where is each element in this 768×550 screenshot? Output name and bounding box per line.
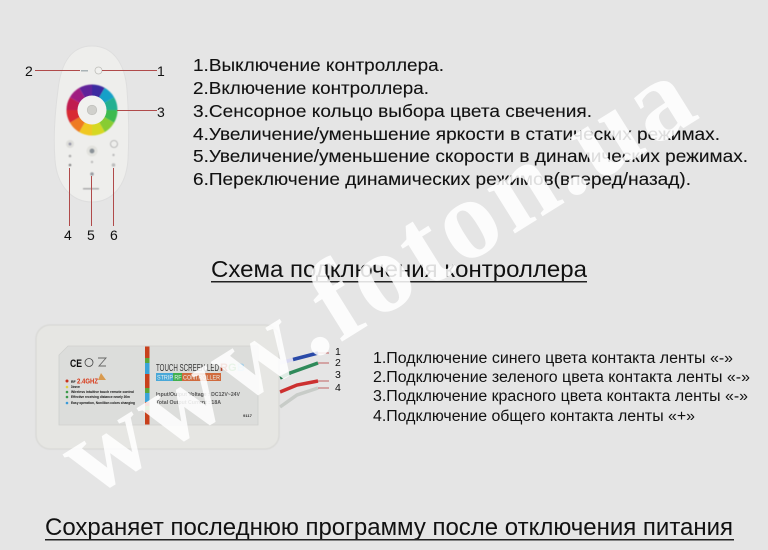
product title: G [228, 362, 237, 374]
wiring list: 1.Подключение синего цвета контакта ленты «-» [373, 350, 733, 367]
2.4GHz badge: 2.4GHZ [77, 378, 99, 386]
wire numbers [335, 346, 341, 394]
feature list: 5.Увеличение/уменьшение скорости в динамических режимах. [193, 146, 748, 166]
ratings text: 9117 [243, 413, 253, 418]
wiring list: 4.Подключение общего контакта ленты «+» [373, 408, 695, 425]
product title: B [237, 362, 245, 374]
heading: wiring diagram: Схема подключения контроллера [211, 256, 587, 282]
2.4GHz badge: RF [71, 380, 77, 384]
callout numbers: 6 [110, 227, 118, 243]
wire numbers: 3 [335, 369, 341, 381]
ring centre [78, 96, 106, 124]
feature list: 6.Переключение динамических режимов(вперед/назад). [193, 169, 691, 189]
feature bullets: Easy operation, Nonillion colors changing [71, 401, 135, 405]
wire leads [318, 353, 329, 388]
feature bullets: Dimmer [71, 385, 80, 389]
touch buttons [66, 140, 118, 190]
colour strip [145, 346, 150, 424]
feature bullets [66, 385, 135, 405]
callout numbers: 5 [87, 227, 95, 243]
certification marks: CE [70, 358, 82, 370]
wiring list: 2.Подключение зеленого цвета контакта ленты «-» [373, 369, 750, 386]
watermark: www.foton.ua [36, 29, 717, 520]
feature list: 4.Увеличение/уменьшение яркости в статических режимах. [193, 124, 720, 144]
callout numbers: 1 [157, 63, 165, 79]
callout lines [35, 70, 157, 226]
wiring list [373, 350, 750, 425]
remote body [54, 46, 129, 202]
label panel [59, 346, 258, 425]
power buttons [81, 67, 102, 74]
feature list: 1.Выключение контроллера. [193, 55, 444, 75]
wire numbers: 2 [335, 357, 341, 369]
callout numbers: 3 [157, 104, 165, 120]
wiring list: 3.Подключение красного цвета контакта ленты «-» [373, 388, 748, 405]
controller box [36, 325, 341, 449]
feature list: 3.Сенсорное кольцо выбора цвета свечения. [193, 101, 592, 121]
feature bullets: Wireless intuitive touch remote control [71, 390, 134, 394]
wires [280, 353, 318, 407]
product title: R [220, 362, 228, 374]
callout numbers: 4 [64, 227, 72, 243]
certification marks [70, 358, 106, 370]
colour ring [66, 84, 118, 136]
feature bullets: Effective receiving distance nearly 30m [71, 395, 130, 399]
housing [36, 325, 279, 449]
feature list [193, 55, 748, 189]
ratings text [156, 392, 253, 418]
ratings text: Input/Output Voltage : DC12V~24V [156, 392, 240, 398]
wire numbers: 1 [335, 346, 341, 358]
footer note: Сохраняет последнюю программу после отключения питания [45, 514, 733, 541]
product title: TOUCH SCREEN LED [156, 363, 219, 374]
remote control with callouts [25, 46, 165, 243]
callout numbers [25, 63, 165, 243]
feature list: 2.Включение контроллера. [193, 78, 429, 98]
wire numbers: 4 [335, 382, 341, 394]
callout numbers: 2 [25, 63, 33, 79]
2.4GHz badge [66, 373, 106, 386]
ratings text: Total Output Current : 18A [156, 400, 221, 406]
strip controller band: STRIP RF CONTROLLER [157, 374, 220, 382]
